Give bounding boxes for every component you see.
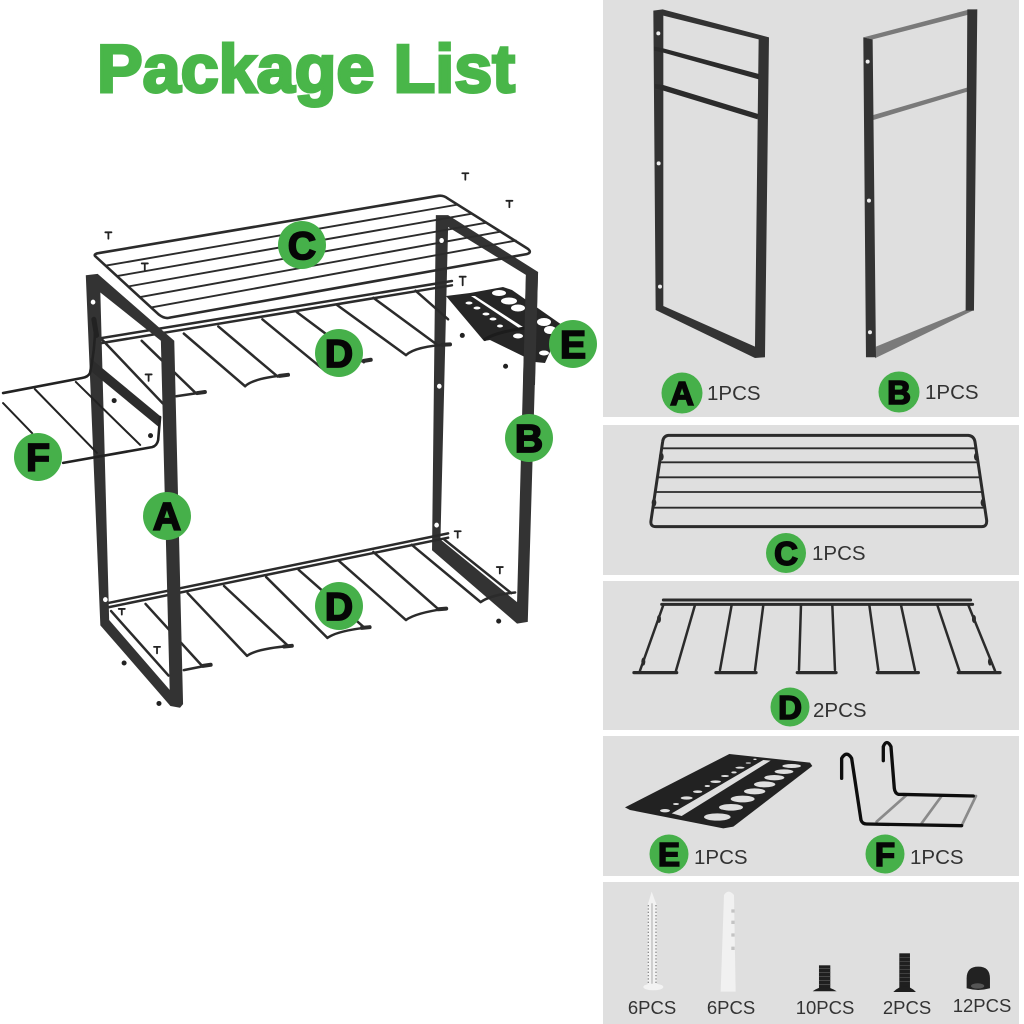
part B drawing bbox=[863, 9, 977, 358]
label C: C bbox=[774, 535, 798, 572]
assembled rack diagram bbox=[3, 173, 538, 708]
hardware quantities: 6PCS bbox=[628, 997, 676, 1018]
panel: hardware bbox=[603, 882, 1019, 1024]
frame B bbox=[432, 215, 538, 624]
upper rail D bbox=[96, 281, 452, 403]
badge B: B bbox=[515, 418, 543, 461]
frame holes bbox=[91, 238, 444, 602]
icon: long bolt bbox=[893, 953, 916, 992]
title: Package List bbox=[97, 31, 515, 107]
icon: wall anchor bbox=[721, 892, 736, 992]
badge A bbox=[143, 492, 191, 540]
icon: long screw bbox=[643, 892, 663, 990]
lower rail D bbox=[107, 533, 515, 676]
label B bbox=[878, 372, 979, 412]
part F drawing bbox=[842, 742, 976, 826]
label D: D bbox=[778, 689, 802, 726]
label A bbox=[662, 372, 761, 414]
badge E: E bbox=[560, 324, 586, 367]
lower rail hook tips bbox=[203, 609, 446, 666]
plate E on rack bbox=[446, 272, 562, 385]
hardware quantities: 12PCS bbox=[953, 995, 1011, 1016]
panel: rail D bbox=[603, 581, 1019, 730]
frame A bbox=[86, 274, 183, 708]
label E: E bbox=[658, 836, 680, 873]
part E drawing bbox=[625, 754, 812, 828]
icon: end cap bbox=[967, 967, 990, 990]
hardware quantities: 6PCS bbox=[707, 997, 755, 1018]
shelf C bbox=[95, 196, 530, 318]
label F: F bbox=[875, 836, 895, 873]
label C: 1PCS bbox=[812, 542, 866, 565]
badge E bbox=[549, 320, 597, 368]
part D drawing bbox=[634, 600, 1000, 673]
hardware quantities: 10PCS bbox=[796, 997, 854, 1018]
label B: B bbox=[887, 374, 911, 411]
panel: shelf C bbox=[603, 425, 1019, 575]
badge A: A bbox=[153, 496, 181, 539]
badge D upper: D bbox=[325, 333, 353, 376]
label A: 1PCS bbox=[707, 382, 761, 405]
badge C bbox=[278, 221, 326, 269]
label A: A bbox=[670, 375, 694, 412]
frame A crossbar bbox=[90, 358, 160, 428]
hardware quantities bbox=[628, 995, 1011, 1018]
label E: 1PCS bbox=[694, 846, 748, 869]
upper rail hook tips bbox=[197, 344, 450, 393]
badge D upper bbox=[315, 329, 363, 377]
hardware quantities: 2PCS bbox=[883, 997, 931, 1018]
label B: 1PCS bbox=[925, 381, 979, 404]
badge D lower: D bbox=[325, 586, 353, 629]
tool holder F bbox=[3, 319, 160, 463]
panel: frames A and B bbox=[603, 0, 1019, 417]
label F: 1PCS bbox=[910, 846, 964, 869]
loose nuts bbox=[114, 335, 506, 703]
label C bbox=[766, 533, 866, 573]
badge B bbox=[505, 414, 553, 462]
part C drawing bbox=[651, 435, 987, 527]
label E bbox=[650, 834, 748, 874]
icon: short bolt bbox=[813, 965, 837, 991]
panel: plate E and holder F bbox=[603, 736, 1019, 876]
part A drawing bbox=[653, 9, 769, 358]
label F bbox=[866, 834, 964, 874]
badge C: C bbox=[288, 225, 316, 268]
badge F bbox=[14, 433, 62, 481]
badge D lower bbox=[315, 582, 363, 630]
badge F: F bbox=[26, 437, 50, 480]
label D bbox=[770, 688, 867, 726]
label D: 2PCS bbox=[813, 699, 867, 722]
loose screws bbox=[105, 173, 512, 653]
